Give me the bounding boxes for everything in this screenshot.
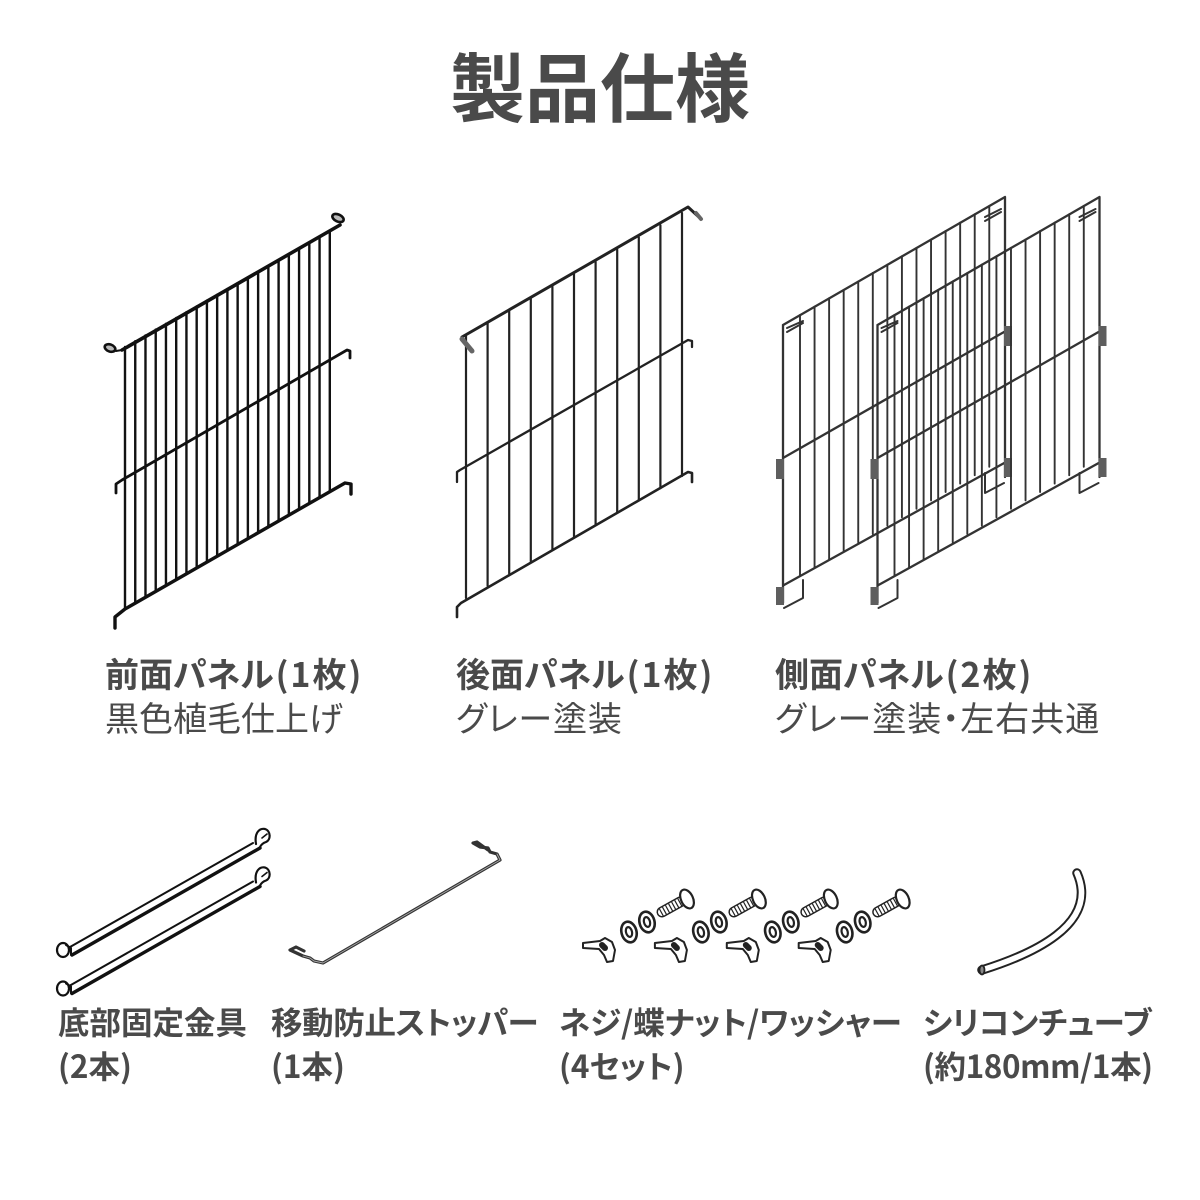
side panel: front xyxy=(870,197,1106,608)
illustration: silicone tube xyxy=(980,873,1082,974)
label: front panel: 黒色植毛仕上げ xyxy=(105,692,343,741)
bracket lower xyxy=(57,867,270,996)
illustration: screws, wing nuts and washers xyxy=(583,887,912,962)
label: back panel xyxy=(456,648,714,741)
label: hardware: (4セット) xyxy=(559,1042,685,1088)
label: side panels: 側面パネル(2枚) xyxy=(775,648,1033,697)
label: bottom fixing brackets: 底部固定金具 xyxy=(58,998,247,1044)
label: side panels xyxy=(775,648,1100,741)
side panel: rear xyxy=(776,197,1012,608)
label: movement stopper xyxy=(271,998,538,1088)
label: hardware: ネジ/蝶ナット/ワッシャー xyxy=(559,998,902,1044)
hardware set 1 xyxy=(583,887,697,962)
label: silicone tube xyxy=(923,998,1153,1088)
label: movement stopper: (1本) xyxy=(271,1042,345,1088)
label: back panel: グレー塗装 xyxy=(456,692,623,741)
label: front panel xyxy=(105,648,363,741)
label: front panel: 前面パネル(1枚) xyxy=(105,648,363,697)
label: hardware xyxy=(559,998,902,1088)
title: 製品仕様 xyxy=(450,29,750,138)
hardware set 3 xyxy=(727,887,840,962)
label: silicone tube: (約180mm/1本) xyxy=(923,1042,1153,1088)
label: back panel: 後面パネル(1枚) xyxy=(456,648,714,697)
illustration: movement stopper xyxy=(290,842,500,963)
hardware set 4 xyxy=(799,887,912,962)
illustration: bottom fixing brackets xyxy=(57,829,270,996)
hardware set 2 xyxy=(655,887,769,962)
label: movement stopper: 移動防止ストッパー xyxy=(271,998,538,1044)
label: bottom fixing brackets: (2本) xyxy=(58,1042,132,1088)
label: side panels: グレー塗装・左右共通 xyxy=(775,692,1100,741)
illustration: back panel xyxy=(457,207,701,617)
bracket upper xyxy=(57,829,270,957)
illustration: side panels xyxy=(776,197,1106,608)
illustration: front panel xyxy=(104,212,351,628)
label: bottom fixing brackets xyxy=(58,998,247,1088)
label: silicone tube: シリコンチューブ xyxy=(923,998,1151,1044)
